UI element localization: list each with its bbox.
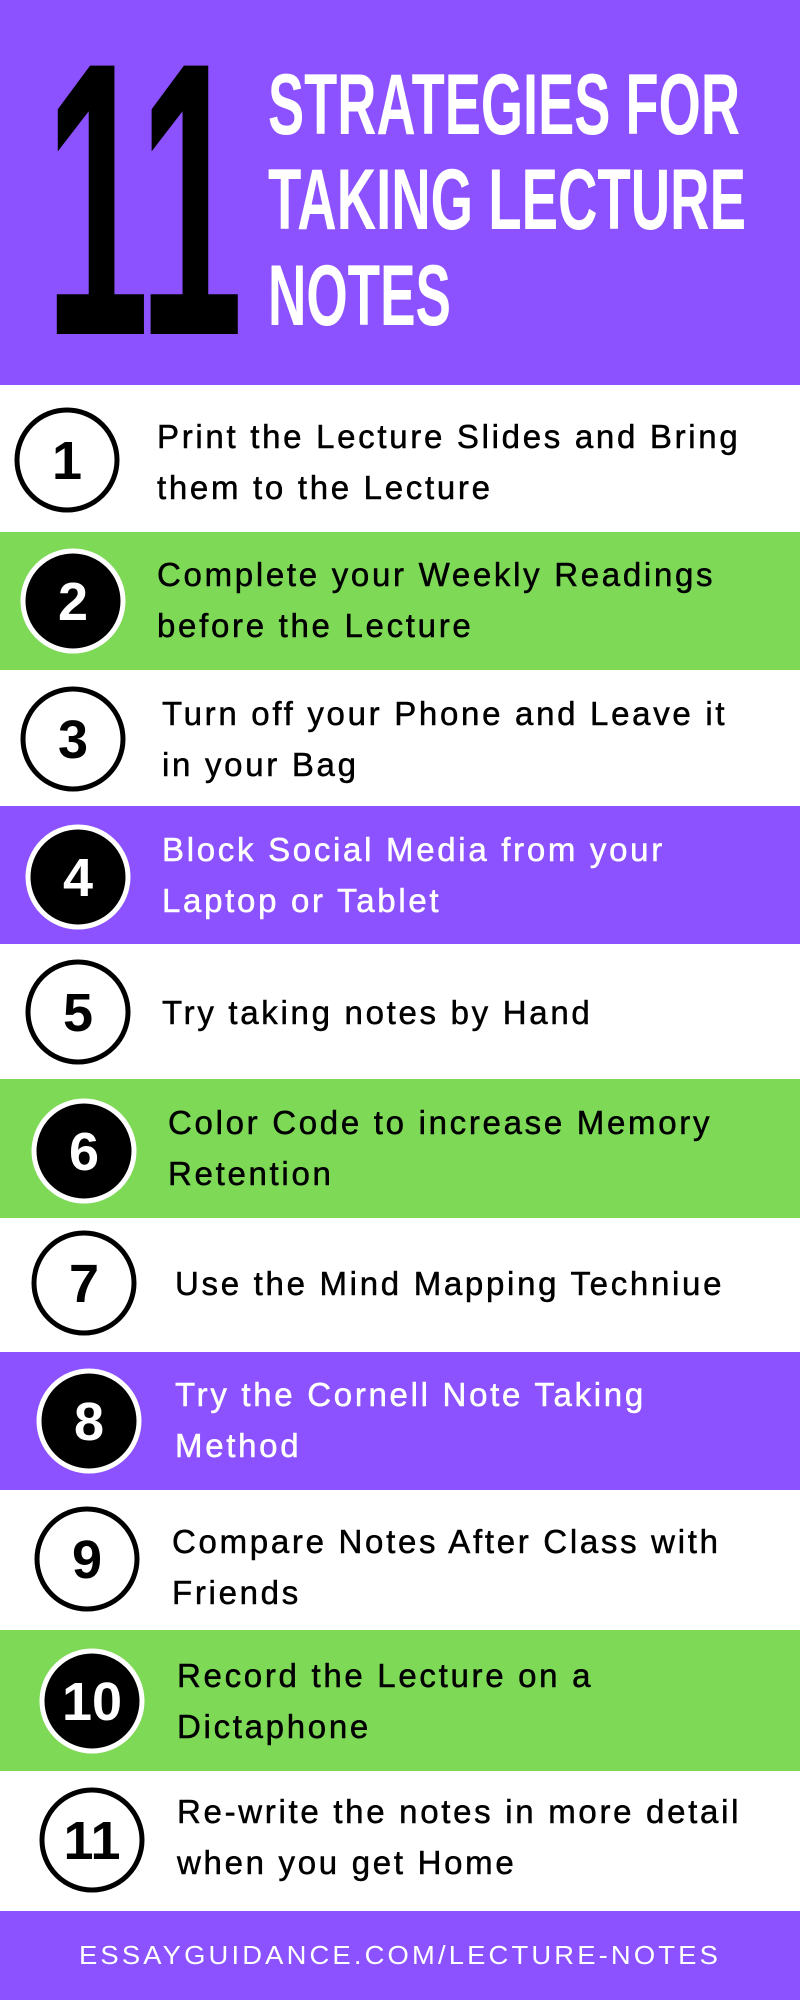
- row 9: 9: [72, 1530, 102, 1590]
- row 8: Try the Cornell Note Taking: [175, 1376, 646, 1413]
- row 3: 3: [58, 710, 88, 770]
- row 2: 2: [58, 572, 88, 632]
- row 1: 1: [52, 431, 82, 491]
- row 1: [0, 385, 800, 532]
- header: [0, 0, 800, 417]
- row 9: [0, 1490, 800, 1630]
- row 11: Re-write the notes in more detail: [177, 1793, 741, 1830]
- footer: [0, 1911, 800, 2000]
- row 10: [0, 1630, 800, 1771]
- row 6: Retention: [168, 1155, 334, 1192]
- row 1: Print the Lecture Slides and Bring: [157, 418, 740, 455]
- row 9: Compare Notes After Class with: [172, 1523, 721, 1560]
- row 8: [0, 1352, 800, 1490]
- row 3: [0, 670, 800, 806]
- row 2: [0, 532, 800, 670]
- row 6: 6: [69, 1122, 99, 1182]
- row 5: Try taking notes by Hand: [162, 994, 592, 1031]
- row 10: Record the Lecture on a: [177, 1657, 593, 1694]
- row 7: 7: [69, 1254, 99, 1314]
- row 10: 10: [62, 1672, 122, 1732]
- row 7: Use the Mind Mapping Techniue: [175, 1265, 724, 1302]
- row 11: 11: [63, 1811, 121, 1871]
- row 7: [0, 1218, 800, 1352]
- row 3: in your Bag: [162, 746, 359, 783]
- row 5: 5: [63, 983, 93, 1043]
- row 11: [0, 1771, 800, 1911]
- row 4: Laptop or Tablet: [162, 882, 441, 919]
- row 2: Complete your Weekly Readings: [157, 556, 715, 593]
- row 3: Turn off your Phone and Leave it: [162, 695, 727, 732]
- row 4: [0, 806, 800, 944]
- footer: ESSAYGUIDANCE.COM/LECTURE-NOTES: [79, 1940, 721, 1970]
- row 11: when you get Home: [176, 1844, 516, 1881]
- row 10: Dictaphone: [177, 1708, 371, 1745]
- row 9: Friends: [172, 1574, 301, 1611]
- title: NOTES: [268, 248, 451, 344]
- row 6: Color Code to increase Memory: [168, 1104, 712, 1141]
- row 4: 4: [63, 848, 93, 908]
- row 1: them to the Lecture: [157, 469, 493, 506]
- row 8: 8: [74, 1392, 104, 1452]
- row 2: before the Lecture: [157, 607, 473, 644]
- row 4: Block Social Media from your: [162, 831, 665, 868]
- row 5: [0, 944, 800, 1079]
- row 8: Method: [175, 1427, 301, 1464]
- row 6: [0, 1079, 800, 1218]
- title: [268, 57, 746, 344]
